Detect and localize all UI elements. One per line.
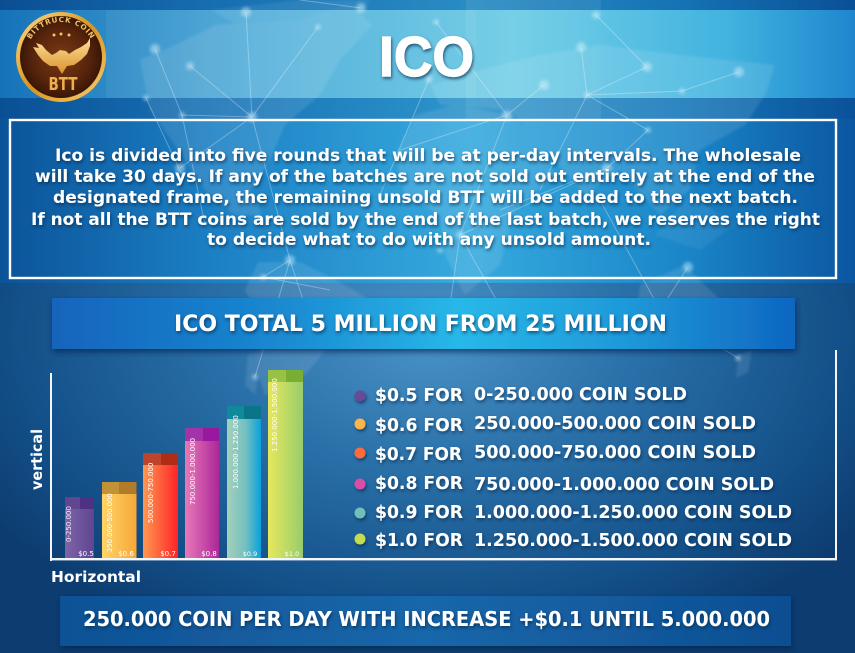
legend row: $0.8: [354, 473, 774, 495]
bar: $0.6: $0.6: [118, 550, 134, 558]
header band: [0, 10, 855, 98]
intro paragraph: [31, 146, 820, 250]
legend row: $0.9: $0.9 FOR: [375, 502, 463, 523]
intro paragraph: If not all the BTT coins are sold by the end of the last batch, we reserves the right: [31, 210, 820, 230]
intro paragraph: Ico is divided into five rounds that will be at per-day intervals. The wholesale: [55, 146, 801, 166]
axis label: horizontal: Horizontal: [51, 568, 141, 586]
title: ICO: [379, 25, 474, 89]
axis label: vertical: vertical: [28, 429, 46, 490]
bar: $1.0: $1.0: [285, 550, 299, 558]
intro paragraph: to decide what to do with any unsold amount.: [207, 230, 651, 250]
logo: Bittruck Coin medal: BITTRUCK COIN: [26, 16, 95, 39]
legend row: $0.6: 250.000-500.000 COIN SOLD: [474, 413, 756, 434]
banner: coin per day: 250.000 COIN PER DAY WITH INCREASE +$0.1 UNTIL 5.000.000: [83, 607, 770, 631]
logo: Bittruck Coin medal: BTT: [48, 74, 78, 95]
legend row: $0.5: [354, 384, 687, 406]
intro text box: [10, 120, 836, 278]
bar: $1.0: [268, 370, 303, 558]
bar chart: [65, 370, 303, 558]
legend row: $0.8: 750.000-1.000.000 COIN SOLD: [474, 474, 774, 495]
bar: $0.9: 1.000.000-1.250.000: [232, 415, 240, 489]
legend row: $0.9: 1.000.000-1.250.000 COIN SOLD: [474, 502, 792, 523]
intro paragraph: designated frame, the remaining unsold BTT will be added to the next batch.: [53, 188, 798, 208]
bar: $0.8: [185, 428, 219, 558]
legend row: $0.7: 500.000-750.000 COIN SOLD: [474, 442, 756, 463]
bar: $0.7: $0.7: [160, 550, 176, 558]
bar: $0.9: [227, 406, 261, 558]
bar: $0.5: 0-250.000: [65, 506, 73, 542]
logo: Bittruck Coin medal: [16, 12, 106, 102]
intro paragraph: will take 30 days. If any of the batches are not sold out entirely at the end of the: [35, 167, 815, 187]
network lines: [146, 0, 739, 377]
legend row: $0.5: $0.5 FOR: [375, 385, 463, 406]
banner: coin per day: [60, 596, 791, 646]
bar: $0.8: $0.8: [201, 550, 217, 558]
chart frame axes: [50, 350, 837, 561]
legend: [354, 384, 792, 551]
header lighter panels: [106, 0, 855, 119]
legend row: $1.0: 1.250.000-1.500.000 COIN SOLD: [474, 530, 792, 551]
legend row: $1.0: $1.0 FOR: [375, 530, 463, 551]
legend row: $0.7: [354, 442, 756, 465]
legend row: $0.7: $0.7 FOR: [375, 444, 462, 465]
bar: $0.9: $0.9: [243, 550, 257, 558]
bar: $0.6: [102, 482, 136, 558]
banner: ICO total: ICO TOTAL 5 MILLION FROM 25 MILLION: [174, 311, 667, 337]
bar: $0.6: 250.000-500.000: [106, 493, 114, 552]
bar: $0.5: [65, 497, 94, 558]
network nodes: [143, 3, 744, 380]
bar: $0.7: 500.000-750.000: [147, 463, 155, 523]
legend row: $0.6: $0.6 FOR: [375, 415, 463, 436]
bar: $1.0: 1.250.000-1.500.000: [271, 378, 279, 452]
bar: $0.5: $0.5: [78, 550, 94, 558]
legend row: $0.8: $0.8 FOR: [375, 473, 463, 494]
bar: $0.8: 750.000-1.000.000: [189, 438, 197, 505]
world map: [140, 0, 775, 395]
legend row: $0.6: [354, 413, 756, 436]
banner: ICO total: [52, 298, 795, 349]
legend row: $0.5: 0-250.000 COIN SOLD: [474, 384, 687, 405]
bar: $0.7: [143, 453, 178, 558]
